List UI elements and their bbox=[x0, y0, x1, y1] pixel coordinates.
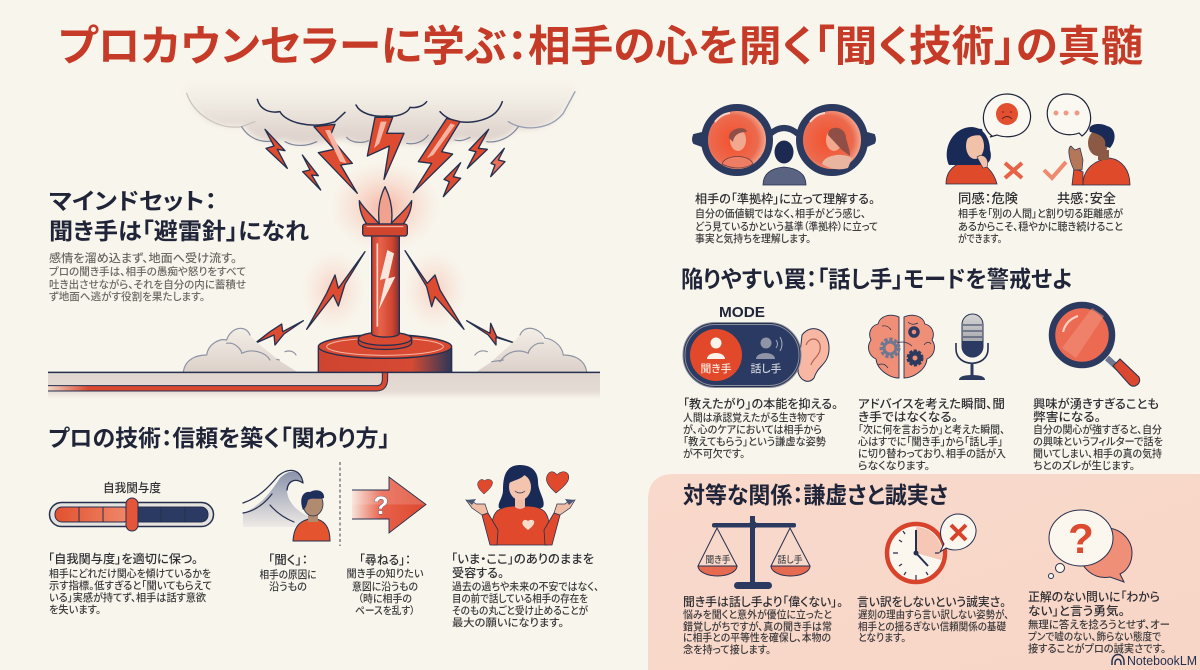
text: ask bbox=[346, 552, 424, 617]
text: advice moment: 「次に何を言おうか」と考えた瞬間、 bbox=[858, 423, 1005, 436]
text: sympathy versus empathy: 同感：危険 bbox=[958, 191, 1018, 206]
text: ask: 「尋ねる」： bbox=[359, 552, 411, 567]
text: sympathy versus empathy: ができます。 bbox=[958, 232, 1002, 245]
text: not superior: に相手との平等性を確保し、本物の bbox=[683, 631, 831, 644]
text: teaching instinct: 「教えてもらう」という謙虚な姿勢 bbox=[683, 435, 826, 448]
text: not superior: 悩みを聞くと意外が優位に立ったと bbox=[683, 608, 832, 621]
text: listen: 相手の原因に bbox=[260, 568, 316, 581]
icon: question arrow: ? bbox=[373, 492, 389, 520]
text: too much interest: 聞いてしまい、相手の真の気持 bbox=[1033, 447, 1162, 460]
icon: balance scale: 話し手 bbox=[778, 554, 803, 566]
icon: accepting woman with hearts bbox=[466, 465, 575, 545]
rod crown bbox=[359, 187, 412, 236]
text: no excuses bbox=[857, 594, 1009, 644]
text: here and now bbox=[451, 551, 599, 629]
text: sympathy versus empathy: 相手を「別の人間」と割り切る距離感が bbox=[958, 207, 1124, 220]
mindset text: ず地面へ逃がす役割を果たします。 bbox=[49, 290, 205, 303]
text: here and now: 最大の願いになります。 bbox=[452, 616, 564, 629]
text: advice moment: き手ではなくなる。 bbox=[858, 409, 958, 424]
text: frame of reference: どう見ているかという基準（準拠枠）に立って bbox=[695, 220, 878, 233]
text: frame of reference bbox=[695, 191, 878, 245]
slider gauge bbox=[50, 480, 214, 531]
text: teaching instinct: 「教えたがり」の本能を抑える。 bbox=[683, 396, 838, 411]
text: ego involvement: を失います。 bbox=[49, 603, 101, 616]
text: too much interest bbox=[1033, 396, 1163, 472]
text: not superior bbox=[683, 594, 843, 656]
text: here and now: そのもの丸ごと受け止めることが bbox=[452, 604, 589, 617]
text: ego involvement: 「自我関与度」を適切に保つ。 bbox=[48, 551, 198, 566]
lightning bolts from cloud bbox=[255, 117, 516, 345]
text: listen bbox=[260, 552, 316, 593]
text: not superior: 念を持って接します。 bbox=[683, 643, 771, 656]
text: ego involvement: 相手にどれだけ関心を傾けているかを bbox=[49, 567, 211, 580]
section heading: trap: 陥りやすい罠：「話し手」モードを警戒せよ bbox=[681, 266, 1072, 292]
text: teaching instinct: が不可欠です。 bbox=[683, 447, 745, 460]
NotebookLM logo: NotebookLM bbox=[1127, 653, 1197, 668]
text: advice moment: らなくなります。 bbox=[858, 460, 930, 472]
text: advice moment bbox=[858, 397, 1006, 472]
text: advice moment: 心はすでに「聞き手」から「話し手」 bbox=[858, 435, 1003, 448]
icon: wave and listener bbox=[243, 470, 330, 541]
icon: clock with cross bubble bbox=[887, 514, 976, 582]
text: sympathy versus empathy: 共感：安全 bbox=[1057, 191, 1116, 206]
text: courage to say I don't know bbox=[1028, 589, 1170, 655]
icon: mode toggle and ear: MODE bbox=[719, 304, 765, 321]
text: frame of reference: 事実と気持ちを理解します。 bbox=[695, 232, 811, 245]
section heading: pro technique: プロの技術：信頼を築く「関わり方」 bbox=[48, 425, 390, 451]
text: no excuses: 遅刻の理由すら言い訳しない姿勢が、 bbox=[858, 608, 1009, 621]
ground puffs bbox=[183, 328, 587, 372]
panel background: equal relationship bbox=[648, 474, 1200, 670]
ground and wire bbox=[48, 372, 600, 399]
text: ask: ペースを乱す） bbox=[355, 604, 415, 617]
section heading: equal relationship: 対等な関係：謙虚さと誠実さ bbox=[683, 482, 948, 508]
text: no excuses: となります。 bbox=[858, 632, 906, 644]
icon: mode toggle and ear: 話し手 bbox=[750, 362, 782, 375]
text: here and now: 過去の過ちや未来の不安ではなく、 bbox=[452, 580, 599, 593]
mindset heading: マインドセット： bbox=[49, 188, 217, 214]
storm cloud bbox=[187, 80, 575, 145]
mindset text: 吐き出させながら、それを自分の内に蓄積せ bbox=[49, 278, 246, 291]
mindset text: プロの聞き手は、相手の愚痴や怒りをすべて bbox=[49, 265, 246, 278]
text: here and now: 「いま・ここ」のありのままを bbox=[451, 551, 594, 566]
text: courage to say I don't know: 接することがプロの誠実さです。 bbox=[1028, 642, 1166, 655]
title: プロカウンセラーに学ぶ：相手の心を開く「聞く技術」の真髄 bbox=[58, 24, 1143, 71]
rod pole bbox=[372, 235, 399, 337]
illustration: lightning rod bbox=[48, 80, 600, 399]
rod base bbox=[318, 332, 452, 372]
slider gauge: 自我関与度 bbox=[103, 480, 161, 495]
text: too much interest: ちとのズレが生じます。 bbox=[1033, 459, 1135, 472]
text: ego involvement: 示す指標。低すぎると「聞いてもらえて bbox=[49, 579, 212, 592]
text: here and now: 目の前で話している相手の存在を bbox=[452, 592, 588, 605]
text: advice moment: に切り替わっており、相手の話が入 bbox=[858, 447, 1006, 460]
text: frame of reference: 自分の価値観ではなく、相手がどう感じ、 bbox=[695, 207, 866, 220]
icon: balance scale: 聞き手 bbox=[706, 554, 731, 566]
text: courage to say I don't know: 無理に答えを捻ろうとせず、オー bbox=[1028, 618, 1170, 631]
icon: question speech bubbles bbox=[1048, 510, 1132, 582]
icon: mode toggle and ear: 聞き手 bbox=[700, 362, 732, 375]
mindset text bbox=[49, 251, 246, 303]
text: here and now: 受容する。 bbox=[452, 565, 504, 580]
icon: glasses with two people bbox=[693, 108, 875, 185]
text: too much interest: の興味というフィルターで話を bbox=[1033, 435, 1163, 448]
text: courage to say I don't know: 正解のない問いに「わから bbox=[1028, 589, 1160, 604]
text: teaching instinct bbox=[683, 396, 838, 460]
icon: question arrow bbox=[352, 477, 426, 533]
text: advice moment: アドバイスを考えた瞬間、聞 bbox=[858, 397, 1005, 411]
icon: sympathy versus empathy bbox=[946, 94, 1130, 185]
text: sympathy versus empathy bbox=[958, 191, 1124, 245]
text: teaching instinct: が、心のケアにおいては相手から bbox=[683, 423, 822, 436]
icon: brain with gears and microphone bbox=[869, 314, 988, 380]
bolt highlights bbox=[325, 122, 455, 163]
text: listen: 沿うもの bbox=[269, 580, 307, 593]
icon: mode toggle and ear bbox=[684, 304, 829, 386]
text: ask: 聞き手の知りたい bbox=[346, 567, 424, 580]
text: ego involvement bbox=[48, 551, 212, 616]
text: no excuses: 言い訳をしないという誠実さ。 bbox=[857, 594, 1006, 609]
text: ego involvement: いる」実感が持てず、相手は話す意欲 bbox=[49, 591, 206, 604]
text: not superior: 聞き手は話し手より「偉くない」。 bbox=[683, 594, 843, 609]
icon: balance scale bbox=[698, 516, 810, 589]
text: frame of reference: 相手の「準拠枠」に立って理解する。 bbox=[695, 191, 875, 206]
text: courage to say I don't know: プンで嘘のない、飾らない態度で bbox=[1028, 630, 1161, 643]
text: no excuses: 相手との揺るぎない信頼関係の基礎 bbox=[858, 620, 1006, 633]
text: not superior: 錯覚しがちですが、真の聞き手は常 bbox=[683, 620, 832, 633]
mindset text: 感情を溜め込まず、地面へ受け流す。 bbox=[49, 251, 237, 265]
icon: magnifying glass bbox=[1052, 305, 1140, 386]
text: too much interest: 興味が湧きすぎることも bbox=[1033, 396, 1159, 411]
text: ask: 意図に沿うもの bbox=[352, 580, 418, 593]
text: courage to say I don't know: ない」と言う勇気。 bbox=[1028, 603, 1125, 618]
mindset heading: 聞き手は「避雷針」になれ bbox=[49, 218, 309, 244]
text: too much interest: 弊害になる。 bbox=[1033, 409, 1101, 424]
text: teaching instinct: 人間は承認覚えたがる生き物です bbox=[683, 411, 825, 424]
text: ask: （時に相手の bbox=[358, 592, 412, 605]
text: sympathy versus empathy: あるからこそ、穏やかに聴き続けること bbox=[958, 220, 1123, 233]
mindset heading bbox=[49, 188, 309, 244]
glow around rod bbox=[302, 162, 467, 330]
text: too much interest: 自分の関心が強すぎると、自分 bbox=[1033, 423, 1162, 436]
text: listen: 「聞く」： bbox=[268, 552, 308, 567]
icon: question speech bubbles: ? bbox=[1068, 515, 1094, 562]
